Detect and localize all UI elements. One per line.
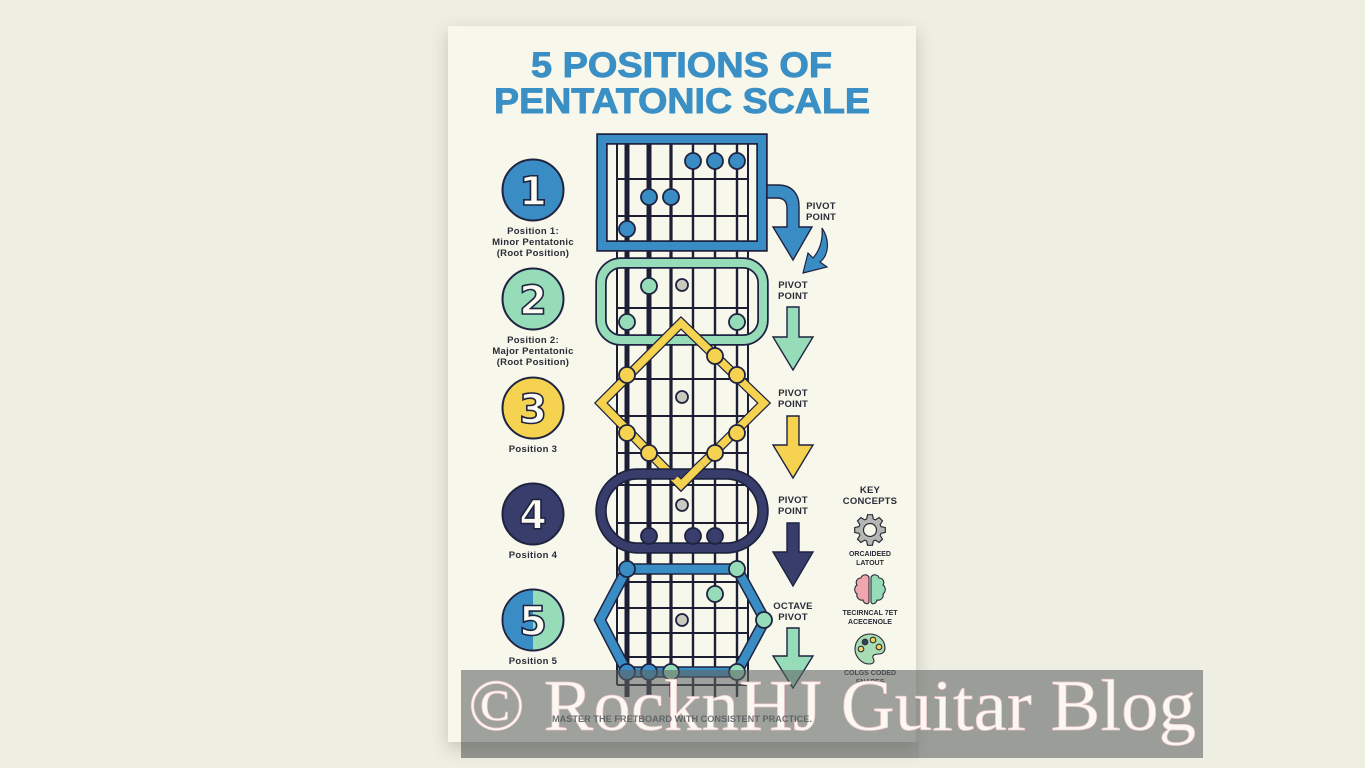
badge 2: [502, 268, 564, 330]
position 1 notes: [619, 153, 745, 237]
label pivot point 3: PIVOT: [778, 388, 808, 399]
label position 2: Position 2:: [507, 335, 559, 346]
poster background: [448, 26, 916, 742]
badge 3: [502, 378, 564, 438]
label octave pivot: [773, 601, 813, 623]
badge 5: [502, 590, 564, 650]
label pivot point 4: POINT: [778, 506, 808, 517]
poster shadow under watermark: [461, 742, 919, 758]
label position 1: Minor Pentatonic: [492, 237, 574, 248]
label pivot point 4: PIVOT: [778, 495, 808, 506]
badge 1: [502, 160, 564, 220]
label organized layout: ORCAIDEED: [849, 551, 891, 558]
position 4 notes: [641, 499, 723, 544]
label pivot point 2: [778, 280, 808, 302]
badge 2: 2: [519, 278, 547, 324]
arrow: navy: [773, 523, 813, 586]
label pivot point 1: PIVOT: [806, 201, 836, 212]
icon: brain: [855, 575, 885, 604]
arrow: small curved blue: [803, 228, 827, 273]
label octave pivot: PIVOT: [778, 612, 808, 623]
arrow: yellow: [773, 416, 813, 478]
arrow: curved blue from box 1: [767, 185, 812, 260]
arrow: green octave: [773, 628, 813, 688]
label position 3: Position 3: [509, 444, 557, 455]
key concepts heading: CONCEPTS: [843, 496, 897, 507]
label technical text: ACECENOLE: [848, 619, 892, 626]
watermark text: © RocknHJ Guitar Blog: [468, 665, 1196, 746]
label pivot point 3: [778, 388, 808, 410]
label octave pivot: OCTAVE: [773, 601, 813, 612]
badge 4: 4: [519, 493, 547, 539]
label organized layout: [849, 551, 891, 567]
title: 5 POSITIONS OF: [531, 46, 832, 85]
label position 1: (Root Position): [497, 248, 569, 259]
badge 1: 1: [519, 169, 547, 215]
badge 4: [502, 484, 564, 544]
badge 3: 3: [519, 387, 547, 433]
label position 2: Major Pentatonic: [492, 346, 574, 357]
label pivot point 1: POINT: [806, 212, 836, 223]
label technical text: TECIRNCAL 7ET: [842, 610, 898, 617]
arrow: green: [773, 307, 813, 370]
position 1 shape: blue box: [602, 139, 762, 246]
label organized layout: LATOUT: [856, 560, 885, 567]
label pivot point 1: [806, 201, 836, 223]
icon: palette: [855, 634, 885, 664]
position 2 shape: green rounded box: [601, 263, 763, 340]
label position 1: [492, 226, 574, 259]
label pivot point 2: POINT: [778, 291, 808, 302]
footer tagline: MASTER THE FRETBOARD WITH CONSISTENT PRACTICE.: [552, 714, 812, 725]
title: [494, 46, 870, 121]
fretboard grid: [617, 144, 748, 697]
label pivot point 2: PIVOT: [778, 280, 808, 291]
position 5 notes: [619, 561, 772, 680]
label position 5: Position 5: [509, 656, 558, 667]
position 3 notes: [619, 348, 745, 461]
position 4 shape: navy stadium: [601, 464, 763, 548]
label technical text: [842, 610, 898, 626]
position 2 notes: [619, 278, 745, 330]
icon: gear: [855, 515, 885, 545]
label color coded shapes: SNAPES: [856, 679, 885, 686]
key concepts heading: KEY: [860, 485, 881, 496]
label color coded shapes: COLGS CODED: [844, 670, 896, 677]
label pivot point 3: POINT: [778, 399, 808, 410]
key concepts heading: [843, 485, 897, 507]
watermark band: [461, 670, 1203, 758]
label pivot point 4: [778, 495, 808, 517]
label color coded shapes: [844, 670, 896, 686]
label position 2: [492, 335, 574, 368]
position 3 shape: yellow diamond: [601, 323, 764, 485]
badge 5: 5: [519, 599, 547, 645]
label position 2: (Root Position): [497, 357, 569, 368]
label position 4: Position 4: [509, 550, 558, 561]
label position 1: Position 1:: [507, 226, 559, 237]
position 5 shape: blue hexagon: [600, 569, 765, 672]
title: PENTATONIC SCALE: [494, 82, 870, 121]
